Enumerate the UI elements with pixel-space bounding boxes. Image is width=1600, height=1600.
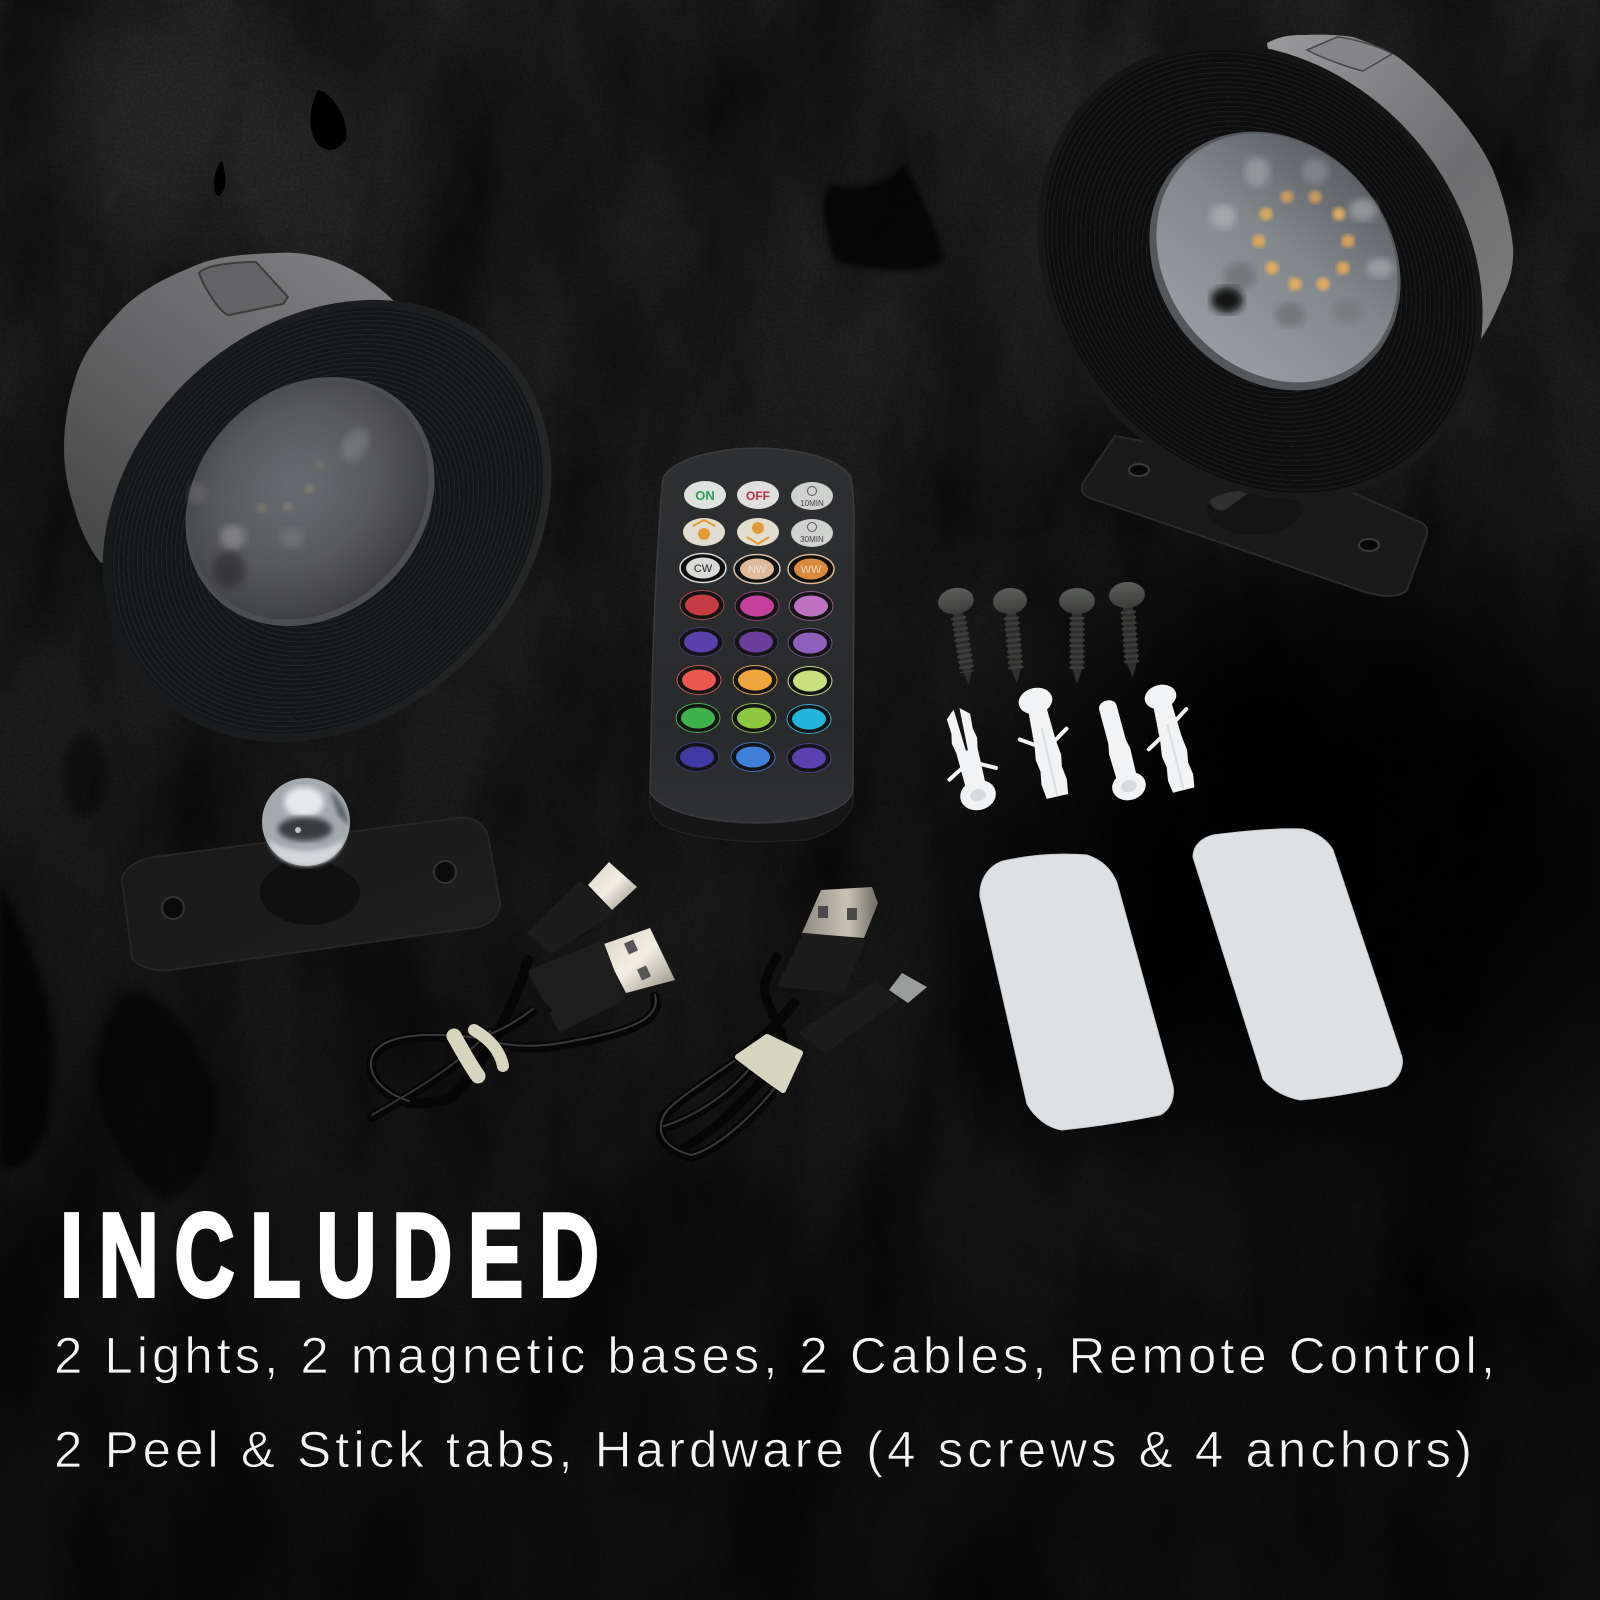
left light lens	[135, 326, 485, 677]
screw 1	[936, 585, 987, 688]
anchor 1	[933, 703, 1005, 815]
cable two wire	[661, 957, 794, 1157]
remote row: colour temperature: NW	[748, 564, 767, 576]
anchor 3	[1090, 696, 1149, 804]
remote control	[650, 448, 854, 842]
remote row: brightness	[683, 518, 833, 547]
remote face	[650, 448, 854, 823]
remote row: colour temperature	[680, 554, 834, 584]
remote row: power and timers	[684, 481, 833, 510]
base stem	[260, 855, 360, 925]
left light body	[64, 253, 395, 563]
cable one wire	[371, 960, 656, 1117]
remote base edge	[650, 790, 853, 842]
cable one tie band	[454, 1030, 503, 1076]
screws	[936, 581, 1151, 688]
cable two tie band	[738, 1037, 800, 1090]
USB-A connector two	[781, 887, 878, 990]
USB-A connector	[520, 928, 675, 1028]
anchor 2	[1009, 683, 1081, 802]
screw 3	[1059, 588, 1095, 684]
remote row: colour temperature: WW	[801, 564, 822, 576]
micro USB connector	[802, 973, 927, 1050]
USB cable one	[371, 862, 675, 1117]
right light	[945, 0, 1575, 590]
magnetic base with ball	[122, 778, 500, 970]
contents list	[54, 1327, 1495, 1478]
screw 2	[992, 587, 1034, 685]
screw 4	[1108, 581, 1151, 679]
remote row: power and timers: OFF	[746, 489, 770, 503]
contents line 2: 2 Peel & Stick tabs, Hardware (4 screws & 4 anchors)	[54, 1421, 1472, 1478]
right light mounting plate	[1082, 436, 1427, 596]
base plate	[122, 818, 500, 970]
wall anchors	[933, 680, 1205, 815]
USB cable two	[661, 887, 927, 1157]
zinc ball	[262, 778, 350, 866]
peel and stick tabs	[980, 829, 1402, 1130]
right light lens with LEDs	[1097, 81, 1453, 441]
left light ringed face	[13, 209, 641, 833]
remote row: power and timers: ON	[695, 488, 715, 503]
left light	[13, 209, 641, 833]
contents line 1: 2 Lights, 2 magnetic bases, 2 Cables, Remote Control,	[54, 1327, 1495, 1384]
peel and stick tab 1	[980, 854, 1173, 1130]
remote row: power and timers: 10MIN	[800, 499, 824, 508]
peel and stick tab 2	[1193, 829, 1402, 1100]
remote colour buttons	[675, 590, 833, 772]
USB-C connector	[530, 862, 637, 951]
remote row: colour temperature: CW	[694, 563, 713, 575]
remote row: brightness: 30MIN	[800, 535, 824, 544]
right light body	[1267, 35, 1513, 343]
right light ringed face	[945, 0, 1575, 590]
power tab on left body	[199, 262, 288, 315]
anchor 4	[1134, 680, 1205, 796]
title: INCLUDED: INCLUDED	[60, 1188, 599, 1321]
power tab on right body	[1307, 37, 1392, 71]
